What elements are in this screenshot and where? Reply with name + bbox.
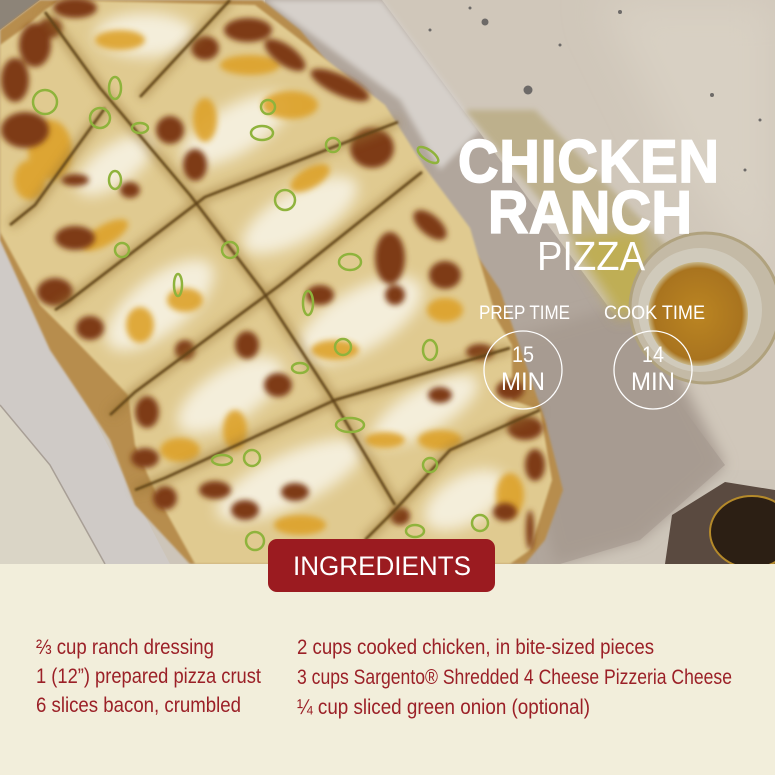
green onions [33, 77, 488, 550]
ingredients list: left column: ⅔ cup ranch dressing [36, 635, 214, 659]
left paper [0, 240, 170, 564]
ingredients list: left column: 6 slices bacon, crumbled [36, 693, 241, 717]
cheese [0, 0, 552, 564]
pizza [0, 0, 563, 564]
table flecks [428, 6, 762, 172]
crust [0, 0, 563, 564]
icon: glass of beer [630, 233, 775, 383]
photo background [0, 0, 775, 568]
prep time: PREP TIME [479, 302, 570, 324]
diagonal band behind title [465, 110, 690, 320]
browned bacon spots [1, 0, 545, 550]
title: PIZZA [537, 233, 646, 279]
prep time: MIN [501, 368, 545, 396]
panel: ingredients background [0, 564, 775, 775]
cook time [604, 302, 705, 409]
ingredients list: left column: 1 (12”) prepared pizza crust [36, 664, 261, 688]
ingredients list: right column: 2 cups cooked chicken, in bite-sized pieces [297, 635, 654, 659]
ingredients heading: INGREDIENTS [293, 551, 471, 581]
slice cuts [10, 0, 540, 540]
ingredients list: left column [36, 635, 261, 717]
title: RANCH [488, 180, 692, 246]
parchment paper [265, 0, 725, 564]
title [458, 129, 719, 279]
ingredients list: right column: ¼ cup sliced green onion (optional) [297, 695, 590, 719]
cook time: 14 [642, 342, 664, 367]
cook time: COOK TIME [604, 302, 705, 324]
soft shadow along cuts [10, 0, 540, 540]
prep time [479, 302, 570, 409]
title: CHICKEN [458, 129, 719, 195]
bottle bottom right [665, 482, 775, 564]
cook time: MIN [631, 368, 675, 396]
table surface [380, 0, 775, 470]
prep time: 15 [512, 342, 534, 367]
cheese highlights [67, 13, 516, 543]
melted cheddar [14, 30, 524, 535]
ingredients list: right column [297, 635, 732, 719]
ingredients heading [268, 539, 495, 592]
